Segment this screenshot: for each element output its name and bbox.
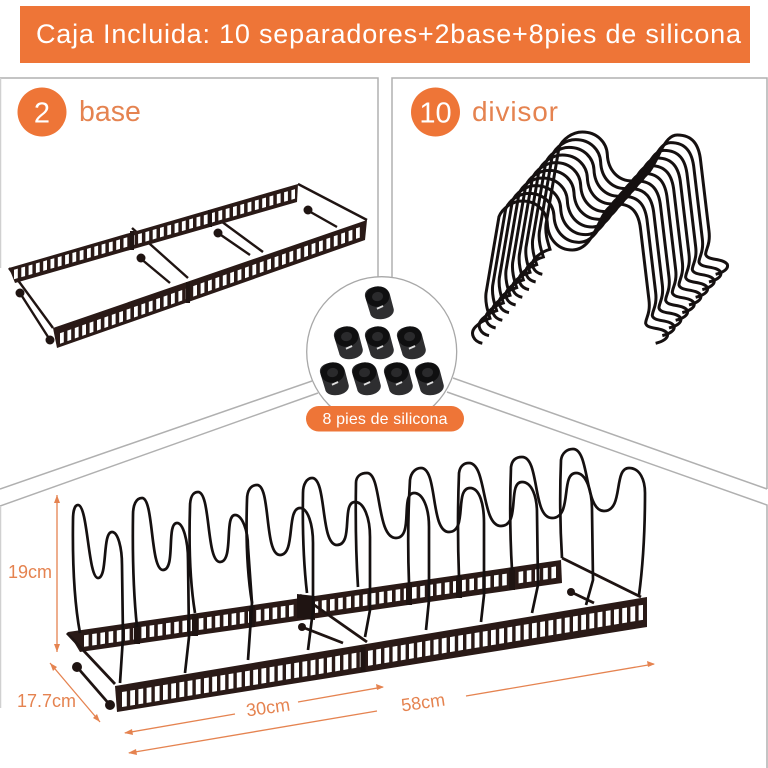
label pill [306,406,464,432]
wire dividers [73,449,645,683]
label pill: 8 pies de silicona [322,411,448,428]
heading: divisor: divisor [472,96,558,127]
badge: 2 [18,88,66,136]
illustration: base frame [9,184,367,348]
panel: silicone feet [306,277,464,432]
dimension: 17.7cm [17,663,100,722]
circle frame [307,277,457,427]
dimension: 19cm: 19cm [8,562,52,582]
panel: assembled rack [8,449,655,755]
header banner: Caja Incluida: 10 separadores+2base+8pies de silicona [36,19,742,49]
front rail [72,588,647,712]
dimension: 19cm [8,495,60,652]
dimension: 58cm [128,661,655,755]
panel: divisor [411,88,728,343]
badge: 10 [411,88,460,136]
illustration: wire dividers [473,132,728,343]
badge: 10: 10 [419,98,452,130]
heading: base: base [79,96,141,128]
badge: 2: 2 [34,98,50,130]
dimension: 30cm [124,684,384,735]
back rail and side bars [67,558,641,705]
dimension: 17.7cm: 17.7cm [17,691,76,711]
icon: silicone feet [319,285,445,397]
dimension: 58cm: 58cm [400,690,446,715]
dimension: 30cm: 30cm [245,695,291,720]
header banner [20,6,750,63]
panel: base [9,88,367,348]
